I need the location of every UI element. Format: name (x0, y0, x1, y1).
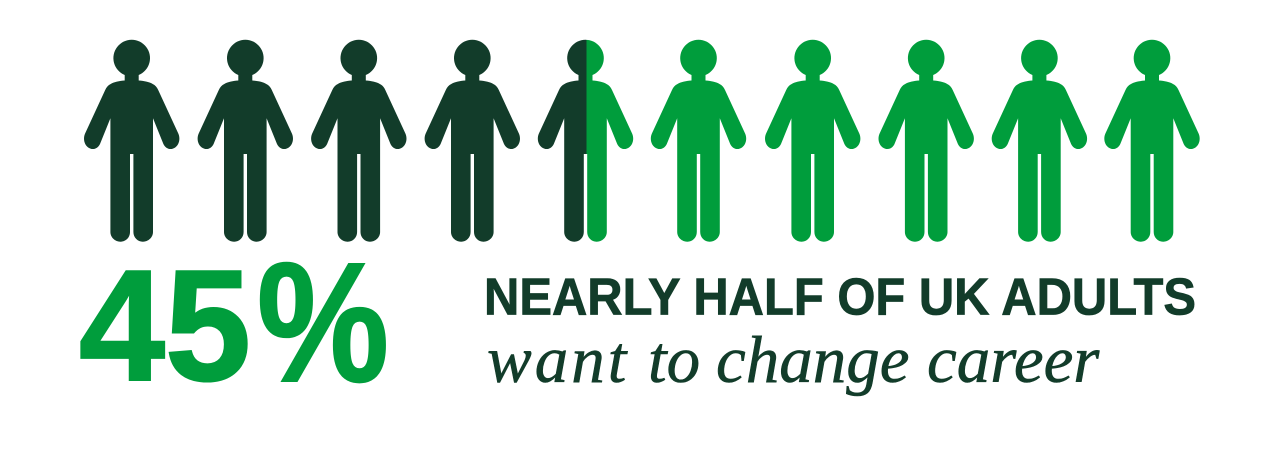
icon: person 2 (dark) (198, 40, 293, 242)
subheadline: change (716, 323, 909, 397)
icon: person 7 (green) (765, 40, 860, 242)
icon: person 3 (dark) (311, 40, 406, 242)
icon: person 10 (green) (1104, 40, 1200, 242)
infographic (80, 40, 1200, 396)
subheadline: to (648, 323, 700, 397)
big percentage figure: % (257, 228, 389, 418)
big percentage figure (79, 228, 389, 418)
subheadline: career (927, 323, 1100, 397)
subheadline: want (487, 323, 629, 397)
icon: person 1 (dark) (84, 40, 179, 242)
headline: NEARLY HALF OF UK ADULTS (484, 268, 1196, 326)
icon: person 4 (dark) (425, 40, 520, 242)
pictogram row: ten people, 45% dark (84, 40, 1200, 242)
icon: person 6 (green) (651, 40, 746, 242)
icon: person 9 (green) (992, 40, 1087, 242)
big percentage figure: 45 (79, 238, 251, 414)
icon: person 5 (half dark, half green) (538, 40, 633, 242)
icon: person 8 (green) (879, 40, 974, 242)
